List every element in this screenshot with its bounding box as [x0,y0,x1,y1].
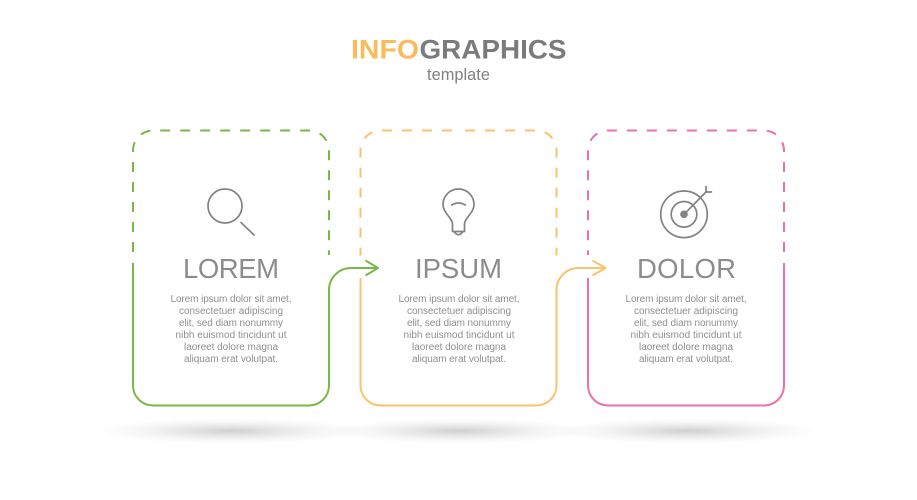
text block: dolor: elit, sed diam nonummy [634,318,738,329]
text block: ipsum: Lorem ipsum dolor sit amet, [398,294,520,305]
icon: target [661,186,712,238]
heading: ipsum: IPSUM [415,253,502,284]
subtitle: template [427,66,490,84]
text block: ipsum: elit, sed diam nonummy [407,318,511,329]
text block: ipsum: laoreet dolore magna [412,342,506,353]
text block: lorem: elit, sed diam nonummy [179,318,283,329]
panel: ipsum [360,130,606,406]
title: INFO [351,34,419,64]
text block: dolor [626,294,746,365]
shadow: card 3 [555,418,819,444]
shadow: card 2 [329,418,589,444]
text block: dolor: Lorem ipsum dolor sit amet, [626,294,746,305]
text block: ipsum: aliquam erat volutpat. [412,354,506,365]
text block: dolor: nibh euismod tincidunt ut [630,330,742,341]
heading: lorem: LOREM [183,253,279,284]
panel: dolor [588,130,784,406]
icon: magnifier [208,189,254,235]
text block: lorem: nibh euismod tincidunt ut [176,330,287,341]
orange dashed outline [360,130,556,256]
title [351,34,566,64]
panel: lorem [133,130,378,406]
shadow: card 1 [96,418,366,444]
pink solid outline [588,263,784,406]
text block: lorem: Lorem ipsum dolor sit amet, [170,294,292,305]
green solid outline and arrow [133,260,378,406]
text block: ipsum [398,294,520,365]
icon: light bulb [443,189,474,235]
text block: ipsum: consectetuer adipiscing [407,306,511,317]
text block: dolor: laoreet dolore magna [639,342,733,353]
text block: lorem: laoreet dolore magna [184,342,278,353]
heading: dolor: DOLOR [637,253,736,284]
title: GRAPHICS [420,34,566,64]
pink dashed outline [588,130,784,262]
text block: dolor: aliquam erat volutpat. [639,354,733,365]
text block: ipsum: nibh euismod tincidunt ut [404,330,515,341]
text block: lorem [170,294,292,365]
text block: lorem: aliquam erat volutpat. [184,354,278,365]
green dashed outline [133,130,329,262]
orange solid outline and arrow [360,260,606,406]
text block: lorem: consectetuer adipiscing [179,306,283,317]
text block: dolor: consectetuer adipiscing [634,306,738,317]
